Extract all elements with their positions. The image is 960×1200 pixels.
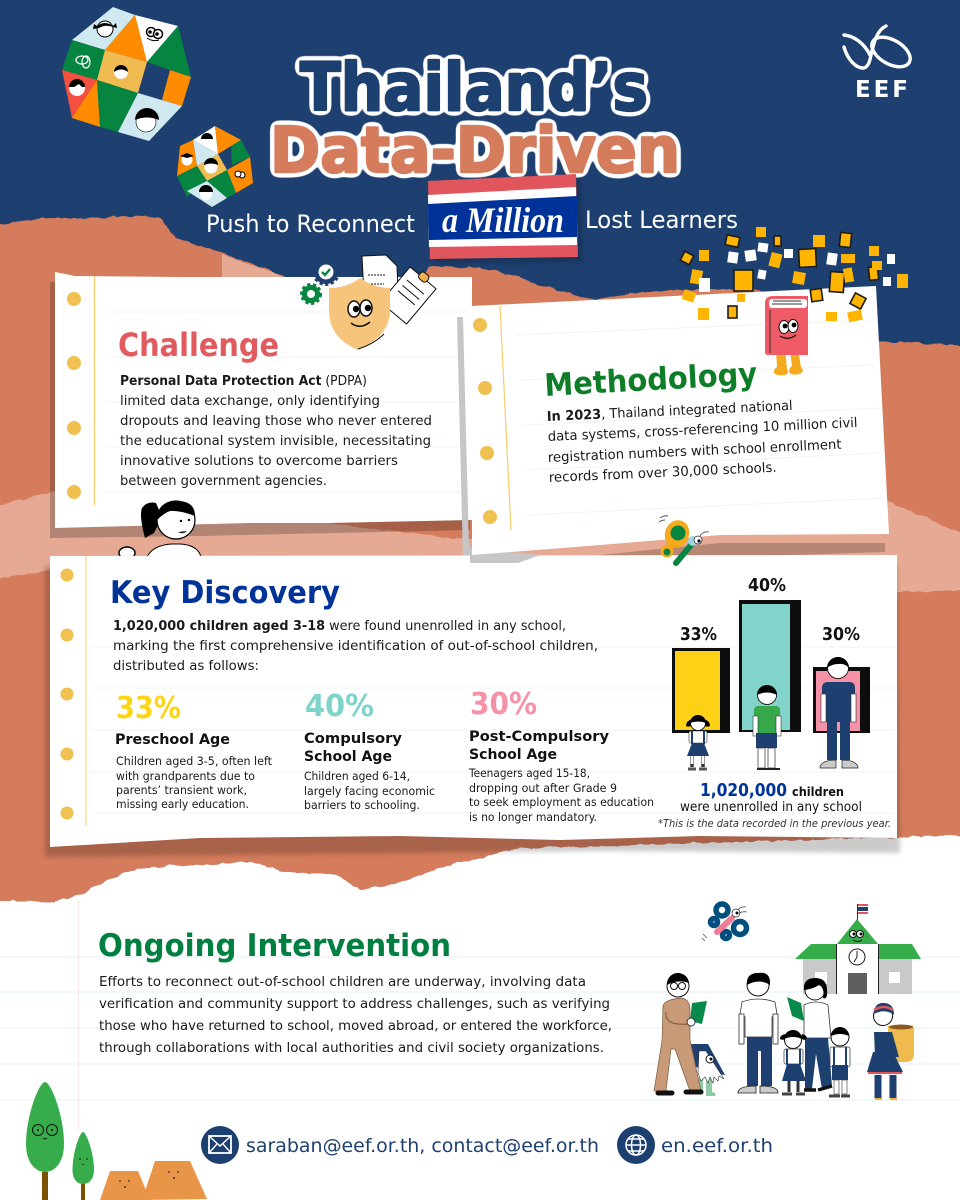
chart caption — [658, 780, 891, 830]
heading: key discovery: Key Discovery — [110, 575, 340, 611]
text: ongoing intervention body: those who have returned to school, moved abroad, or entered the workforce, — [99, 1018, 612, 1034]
stat: post-compulsory school age: Post-Compulsory — [469, 729, 610, 745]
bar chart with children: 33% — [680, 624, 717, 645]
child: boy in green shirt — [753, 685, 781, 769]
stat: compulsory school age: School Age — [304, 749, 392, 765]
text: challenge body: dropouts and leaving those who never entered — [120, 413, 432, 429]
stat: compulsory school age: largely facing economic — [304, 784, 435, 798]
stat: post-compulsory school age: School Age — [469, 747, 557, 763]
icon: group of students and teacher — [738, 973, 914, 1099]
stat: post-compulsory school age — [468, 687, 654, 824]
stat: post-compulsory school age: 30% — [470, 687, 537, 722]
chart caption: children — [792, 784, 844, 799]
icon: orange butterfly — [659, 516, 709, 563]
icon: small tree — [72, 1132, 94, 1200]
text: key discovery intro: marking the first comprehensive identification of out-of-school children, — [113, 638, 598, 654]
icon: school building — [795, 904, 921, 994]
person: boy student — [829, 1027, 850, 1096]
text: key discovery intro: 1,020,000 children aged 3-18 were found unenrolled in any school, — [113, 618, 566, 634]
title — [270, 49, 680, 187]
text: methodology body: data systems, cross-referencing 10 million civil — [547, 415, 858, 445]
stat: preschool age: with grandparents due to — [116, 769, 255, 783]
icon: shield with gears and documents — [302, 255, 439, 350]
flag badge: a Million — [428, 174, 583, 264]
text: challenge body: limited data exchange, only identifying — [120, 393, 380, 409]
person: hill-tribe child with basket — [867, 1003, 914, 1099]
icon: book character — [765, 296, 808, 375]
stat: preschool age: Children aged 3-5, often left — [116, 754, 272, 768]
chart caption: were unenrolled in any school — [680, 800, 862, 815]
logo octagon: small — [177, 126, 253, 207]
child: teen boy in uniform — [820, 657, 858, 768]
stat: post-compulsory school age: to seek employment as education — [469, 795, 654, 809]
stat: preschool age: parents’ transient work, — [116, 783, 247, 797]
stat: preschool age — [115, 691, 272, 811]
stat: compulsory school age: barriers to schooling. — [304, 798, 420, 812]
text: key discovery intro — [113, 618, 598, 674]
icon: navy butterfly — [702, 904, 747, 941]
text: methodology body: records from over 30,000 schools. — [548, 460, 777, 486]
text: methodology body — [546, 398, 858, 486]
title: Thailand’s — [300, 49, 648, 126]
stat: preschool age: Preschool Age — [115, 732, 230, 748]
text: challenge body: between government agencies. — [120, 473, 327, 489]
stat: preschool age: 33% — [116, 691, 181, 726]
text: challenge body: the educational system invisible, necessitating — [120, 433, 431, 449]
chart caption: *This is the data recorded in the previous year. — [658, 818, 891, 830]
stat: compulsory school age: 40% — [305, 689, 374, 724]
text: ongoing intervention body: through collaborations with local authorities and civil society organizations. — [99, 1040, 604, 1056]
text: challenge body: Personal Data Protection Act (PDPA) — [120, 373, 367, 389]
background: torn terracotta layer — [0, 216, 960, 902]
stat: compulsory school age — [304, 689, 435, 812]
EEF logo — [844, 26, 915, 103]
stat: preschool age: missing early education. — [116, 797, 249, 811]
contact: website: en.eef.or.th — [661, 1135, 773, 1157]
panel: challenge — [50, 272, 472, 538]
subtitle: push to reconnect: Push to Reconnect — [206, 210, 415, 238]
bar chart with children: 40% — [748, 575, 786, 596]
contact: email: saraban@eef.or.th, contact@eef.or.th — [246, 1135, 599, 1157]
background: torn white lower section — [0, 835, 960, 1200]
subtitle: lost learners: Lost Learners — [585, 206, 738, 234]
person: girl student — [780, 1030, 807, 1094]
text: challenge body — [120, 373, 432, 489]
icon: officer with tablet and book character — [654, 973, 725, 1096]
text: methodology body: In 2023, Thailand integrated national — [546, 398, 793, 425]
heading: challenge: Challenge — [118, 326, 279, 364]
stat: post-compulsory school age: is no longer mandatory. — [469, 810, 597, 824]
title: Data-Driven — [270, 114, 680, 187]
icon: girl character — [119, 501, 201, 559]
text: ongoing intervention body — [99, 974, 612, 1056]
contact: website — [617, 1126, 773, 1164]
flag badge: a Million: a Million — [442, 200, 564, 240]
EEF logo: EEF — [855, 77, 908, 103]
text: ongoing intervention body: Efforts to reconnect out-of-school children are underway, involving data — [99, 974, 586, 990]
text: challenge body: innovative solutions to overcome barriers — [120, 453, 398, 469]
panel: key discovery — [45, 555, 900, 857]
heading: ongoing intervention: Ongoing Intervention — [98, 928, 451, 964]
stat: post-compulsory school age: Teenagers aged 15-18, — [468, 766, 590, 780]
person: older student — [738, 973, 778, 1093]
stat: post-compulsory school age: dropping out after Grade 9 — [469, 781, 617, 795]
stat: compulsory school age: Children aged 6-14, — [304, 769, 410, 783]
logo octagon: large — [62, 7, 191, 141]
chart caption: 1,020,000 — [700, 780, 787, 801]
heading: methodology: Methodology — [543, 356, 758, 404]
bar chart with children — [658, 575, 891, 830]
text: ongoing intervention body: verification and community support to address challenges, such as verifying — [99, 996, 610, 1012]
icon: confetti squares — [680, 227, 908, 322]
person: teacher — [787, 978, 832, 1090]
child: preschool girl — [686, 715, 710, 769]
panel: methodology — [457, 286, 889, 563]
text: methodology body: registration numbers with school enrollment — [547, 437, 842, 466]
bar chart with children: 30% — [822, 624, 860, 645]
contact: email — [201, 1126, 599, 1164]
stat: compulsory school age: Compulsory — [304, 731, 403, 747]
icon: tree with glasses — [26, 1082, 64, 1200]
text: key discovery intro: distributed as follows: — [113, 658, 259, 674]
icon: hills with faces — [100, 1161, 207, 1200]
